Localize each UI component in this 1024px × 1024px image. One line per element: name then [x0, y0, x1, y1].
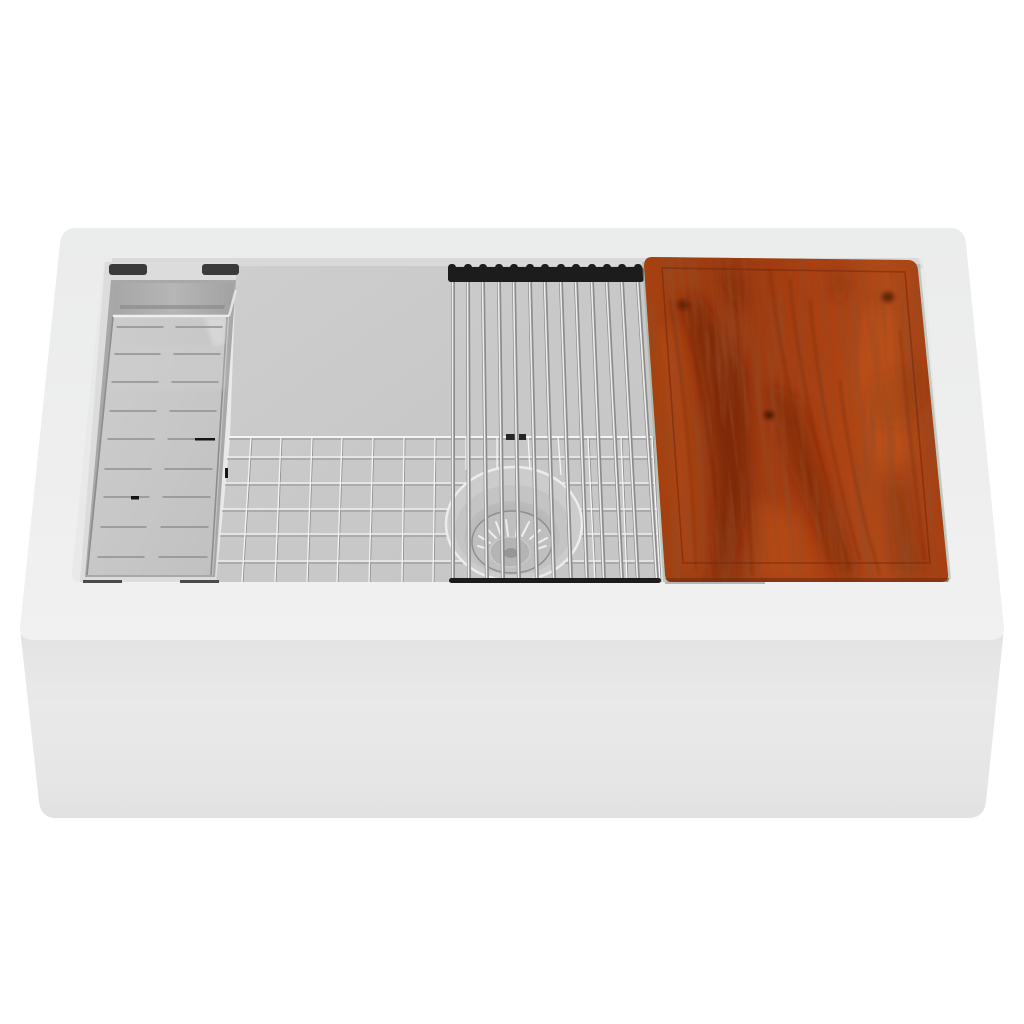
colander floor [87, 317, 229, 575]
wood streaks [670, 270, 925, 575]
board green edge shadow [642, 262, 668, 582]
cutting board [642, 257, 951, 584]
light wood patches [669, 320, 908, 578]
roll-up drying rack [448, 264, 661, 583]
sink top rim [20, 228, 1004, 640]
colander back wall [113, 283, 234, 315]
drain recess [446, 467, 582, 581]
bottom colander tabs [83, 580, 219, 583]
colander outer frame [85, 280, 236, 577]
black mounting tab left [109, 264, 147, 275]
sink front apron [20, 628, 1004, 818]
grid vertical wires [242, 437, 660, 582]
drain funnel rings [455, 485, 571, 575]
small black grid clips [506, 434, 526, 440]
strainer basket [472, 511, 552, 573]
colander drainage slots [98, 327, 222, 557]
rack steel rods, dark edge [453, 282, 657, 580]
board knots [677, 292, 894, 419]
board front edge [665, 578, 949, 582]
board wood grain [648, 257, 938, 578]
black mounting tab right [202, 264, 239, 275]
strainer slots [478, 520, 547, 549]
rack bottom black bar [449, 578, 661, 583]
strainer centre knob [490, 537, 530, 567]
rack top black bar [448, 264, 644, 282]
grain noise [649, 257, 938, 578]
board juice groove [662, 268, 930, 563]
board body [644, 257, 948, 582]
grid horizontal wires [218, 437, 659, 561]
wire bottom grid [218, 437, 661, 582]
rack steel rods, highlight [452, 282, 656, 580]
grid shadow lines [218, 437, 661, 582]
dark wood patches [680, 270, 925, 582]
colander tray [85, 280, 236, 577]
sink basin opening [72, 258, 950, 582]
colander highlight [205, 317, 227, 346]
colander dark reflections [131, 438, 228, 500]
illustration: white farmhouse workstation sink with accessories [20, 228, 1004, 818]
